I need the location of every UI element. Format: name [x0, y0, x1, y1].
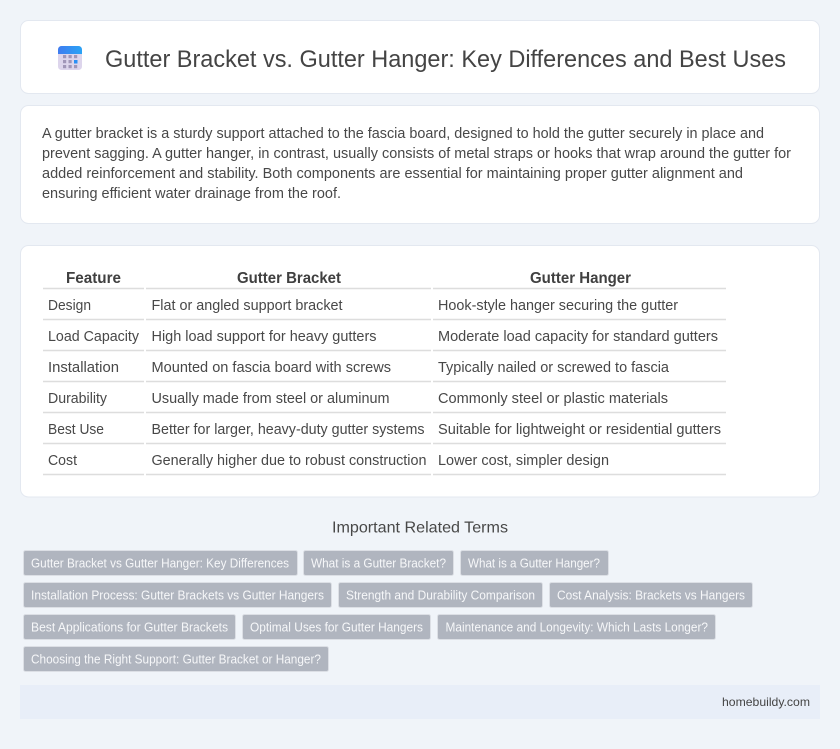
tag: [24, 550, 298, 576]
tag: [24, 614, 236, 640]
row: load capacity: High load support for heavy gutters: [152, 329, 376, 345]
panel: introduction text: [20, 106, 820, 224]
tag: [460, 550, 608, 576]
table header: Feature: [66, 270, 121, 287]
row: best use: Best Use: [48, 422, 104, 438]
row: cost: Cost: [48, 453, 77, 469]
table header: Gutter Bracket: [237, 270, 342, 287]
tag: What is a Gutter Hanger?: [468, 556, 600, 570]
heading: important related terms: Important Related Terms: [332, 520, 508, 536]
row: design: Design: [48, 298, 91, 314]
table header: [66, 270, 631, 287]
row: installation: Typically nailed or screwed to fascia: [438, 360, 670, 376]
row: installation: Installation: [48, 360, 119, 376]
row: cost: Generally higher due to robust construction: [152, 453, 426, 469]
footer bar: homebuildy.com: [722, 695, 810, 709]
row: load capacity: [48, 329, 718, 345]
row: best use: Better for larger, heavy-duty gutter systems: [152, 422, 424, 438]
row: load capacity: Moderate load capacity for standard gutters: [438, 329, 718, 345]
related term tags: [24, 550, 752, 672]
panel: introduction text: ensuring efficient water drainage from the roof.: [42, 186, 341, 202]
tag: [24, 582, 332, 608]
tag: [24, 646, 328, 672]
row: load capacity: Load Capacity: [48, 329, 140, 345]
row: durability: Durability: [48, 391, 108, 407]
tag: Gutter Bracket vs Gutter Hanger: Key Differences: [31, 556, 289, 570]
row: durability: Commonly steel or plastic materials: [438, 391, 668, 407]
row: cost: Lower cost, simpler design: [438, 453, 609, 469]
table header: Gutter Hanger: [530, 270, 631, 287]
tag: Optimal Uses for Gutter Hangers: [250, 620, 423, 634]
tag: Best Applications for Gutter Brackets: [31, 620, 228, 634]
tag: Choosing the Right Support: Gutter Bracket or Hanger?: [31, 652, 321, 666]
panel: introduction text: A gutter bracket is a sturdy support attached to the fascia board, designed to hold the gutter securely in place and: [42, 126, 764, 142]
tag: Strength and Durability Comparison: [346, 588, 535, 602]
panel: introduction text: prevent sagging. A gutter hanger, in contrast, usually consists of metal straps or hooks that wrap around the gutter for: [42, 146, 791, 162]
footer bar: [20, 685, 820, 719]
tag: [304, 550, 454, 576]
tag: [338, 582, 542, 608]
panel: title header: [20, 20, 820, 94]
title: Gutter Bracket vs. Gutter Hanger: Key Differences and Best Uses: [105, 46, 786, 73]
tag: [550, 582, 752, 608]
tag: What is a Gutter Bracket?: [311, 556, 446, 570]
tag: [242, 614, 430, 640]
row: best use: [48, 422, 721, 438]
row: installation: [48, 360, 670, 376]
icon: calendar: [58, 46, 82, 70]
tag: Maintenance and Longevity: Which Lasts Longer?: [446, 620, 708, 634]
row: cost: [48, 453, 609, 469]
row: design: Hook-style hanger securing the gutter: [438, 298, 678, 314]
row: design: [48, 298, 678, 314]
panel: introduction text: added reinforcement and stability. Both components are essential for maintaining proper gutter alignment and: [42, 166, 743, 182]
row: best use: Suitable for lightweight or residential gutters: [438, 422, 721, 438]
panel: comparison table: [20, 246, 820, 497]
row: durability: Usually made from steel or aluminum: [152, 391, 390, 407]
tag: Cost Analysis: Brackets vs Hangers: [557, 588, 745, 602]
tag: [438, 614, 716, 640]
row: installation: Mounted on fascia board with screws: [152, 360, 391, 376]
row: design: Flat or angled support bracket: [152, 298, 342, 314]
row: durability: [48, 391, 668, 407]
tag: Installation Process: Gutter Brackets vs Gutter Hangers: [31, 588, 324, 602]
